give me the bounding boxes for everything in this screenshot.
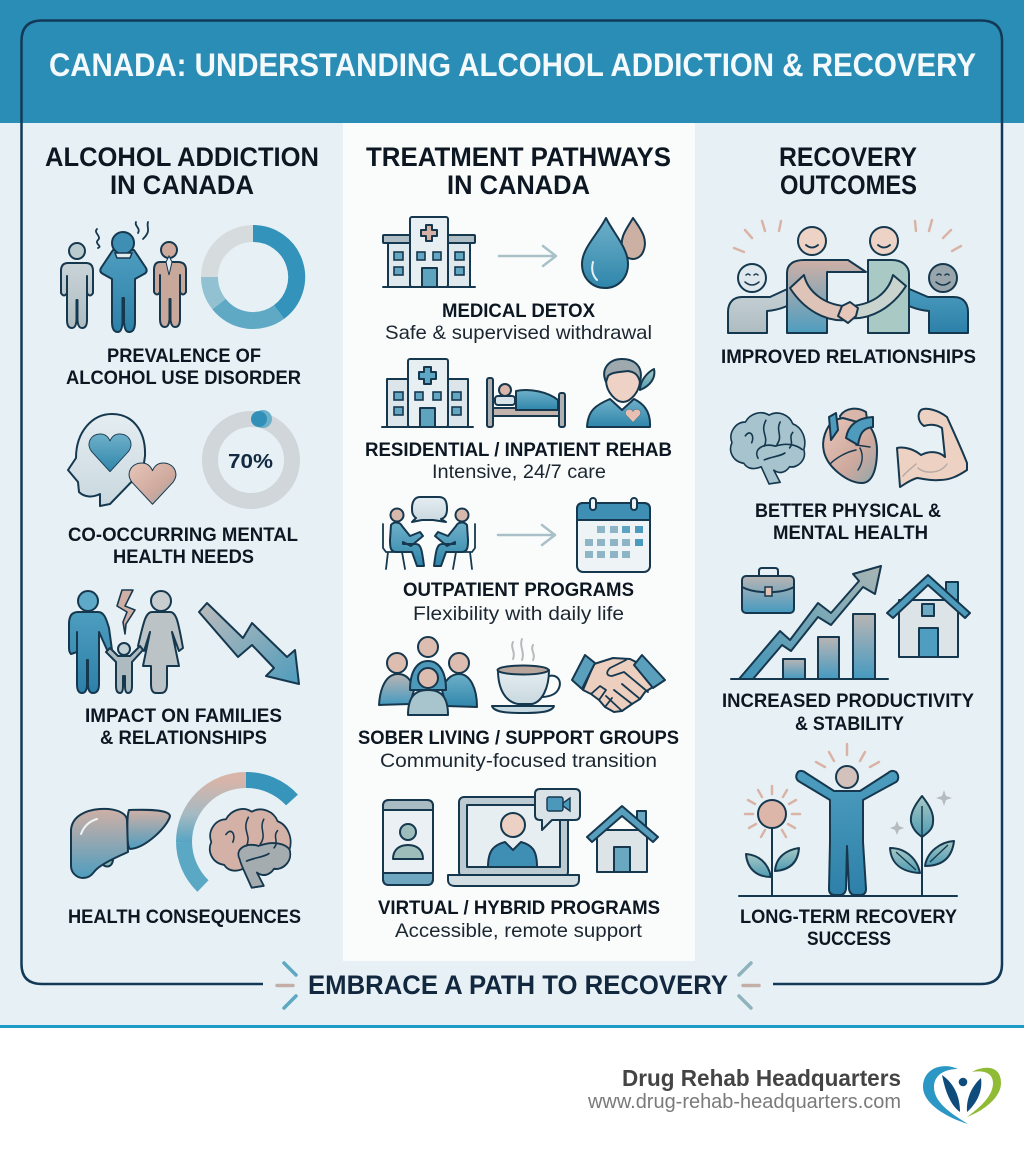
outer frame [22,20,1002,984]
heading: recovery outcomes [779,142,917,200]
label: prevalence: ALCOHOL USE DISORDER [66,367,301,389]
label: medical detox: Safe & supervised withdrawal [385,322,652,344]
icon: three people [61,222,186,332]
icon: handshake [572,655,665,712]
icon: growth ground line [739,895,957,897]
icon: bed [487,378,565,427]
right rays [739,963,751,1008]
icon: briefcase [742,568,794,613]
icon: coffee cup [492,639,560,713]
icon: family with lightning [69,590,183,693]
header band [0,0,1024,123]
icon: head with hearts [68,414,176,506]
label: sober living: SOBER LIVING / SUPPORT GROUPS [358,727,679,749]
heading: recovery outcomes: RECOVERY [779,142,917,172]
label: better health [755,500,941,544]
chart: health arc [184,780,292,886]
logo: heart with figure [923,1066,1001,1124]
content background [0,123,1024,1026]
label: prevalence: PREVALENCE OF [107,345,261,367]
label: residential: RESIDENTIAL / INPATIENT REHAB [365,439,672,461]
left dash [277,984,293,987]
heading: treatment pathways: IN CANADA [447,170,590,200]
label: health consequences: HEALTH CONSEQUENCES [68,906,301,928]
icon: counselling [383,497,475,569]
icon: triumphant person [796,744,898,895]
panel: treatment column background [343,123,695,961]
label: productivity: INCREASED PRODUCTIVITY [722,690,974,712]
panel: treatment pathways [358,142,679,942]
label: long-term recovery: LONG-TERM RECOVERY [740,906,957,928]
label: improved relationships: IMPROVED RELATIONSHIPS [721,346,976,368]
chart: 70 percent ring: 70% [228,451,273,473]
icon: hospital two [382,359,473,427]
label: co-occurring [68,524,298,568]
label: virtual [378,897,660,942]
label: productivity [722,690,974,735]
left rays [284,963,296,1008]
icon: caregiver [587,359,654,427]
label: impact on families [85,705,282,749]
label: medical detox: MEDICAL DETOX [442,300,595,322]
icon: liver [71,809,170,878]
label: co-occurring: HEALTH NEEDS [113,546,254,568]
label: long-term recovery [740,906,957,950]
panel: alcohol addiction in Canada [45,142,319,928]
heading: alcohol addiction: IN CANADA [110,170,254,200]
icon: flexed arm [897,409,967,487]
label: better health: MENTAL HEALTH [773,522,928,544]
footer brand [587,1065,901,1113]
heading: treatment pathways [366,142,671,200]
heading: recovery outcomes: OUTCOMES [780,170,917,200]
icon: house with window [887,575,970,657]
label: residential: Intensive, 24/7 care [432,461,606,483]
label: virtual: VIRTUAL / HYBRID PROGRAMS [378,897,660,919]
label: medical detox [385,300,652,344]
label: long-term recovery: SUCCESS [807,928,891,950]
label: productivity: & STABILITY [795,713,904,735]
heading: alcohol addiction: ALCOHOL ADDICTION [45,142,319,172]
label: impact on families: IMPACT ON FAMILIES [85,705,282,727]
label: sober living: Community-focused transition [380,750,657,772]
label: impact on families: & RELATIONSHIPS [100,727,267,749]
chart: prevalence donut [210,233,297,321]
icon: brain [210,809,291,888]
label: outpatient [403,579,634,625]
footer brand: Drug Rehab Headquarters [622,1065,901,1091]
icon: laptop video call [448,789,580,886]
icon: falling arrow [199,603,299,684]
label: sober living [358,727,679,772]
arrow: detox [499,246,556,266]
icon: brain blue [731,413,805,484]
footer rule [0,1025,1024,1028]
icon: water drops [582,218,645,288]
icon: calendar [577,498,650,572]
icon: house [587,806,658,872]
icon: flower sun [745,786,800,896]
chart: 70 percent ring [210,410,292,501]
icon: plant with sparkles [890,790,954,896]
chart: rising bars and arrow [731,566,888,679]
banner text: EMBRACE A PATH TO RECOVERY [308,970,728,1000]
heading: treatment pathways: TREATMENT PATHWAYS [366,142,671,172]
heading: alcohol addiction [45,142,319,200]
icon: hospital [383,217,475,287]
label: co-occurring: CO-OCCURRING MENTAL [68,524,298,546]
icon: phone [383,800,433,885]
footer brand: www.drug-rehab-headquarters.com [587,1091,901,1113]
right dash [743,984,759,987]
label: outpatient: Flexibility with daily life [413,603,624,625]
arrow: outpatient [498,525,555,545]
label: outpatient: OUTPATIENT PROGRAMS [403,579,634,601]
label: residential [365,439,672,483]
label: better health: BETTER PHYSICAL & [755,500,941,522]
label: virtual: Accessible, remote support [395,920,643,942]
panel: recovery outcomes [721,142,976,950]
label: prevalence [66,345,301,389]
banner: embrace a path to recovery [277,963,759,1008]
icon: people shaking hands [728,220,968,333]
icon: heart organ [823,409,877,483]
icon: support group [379,637,477,715]
